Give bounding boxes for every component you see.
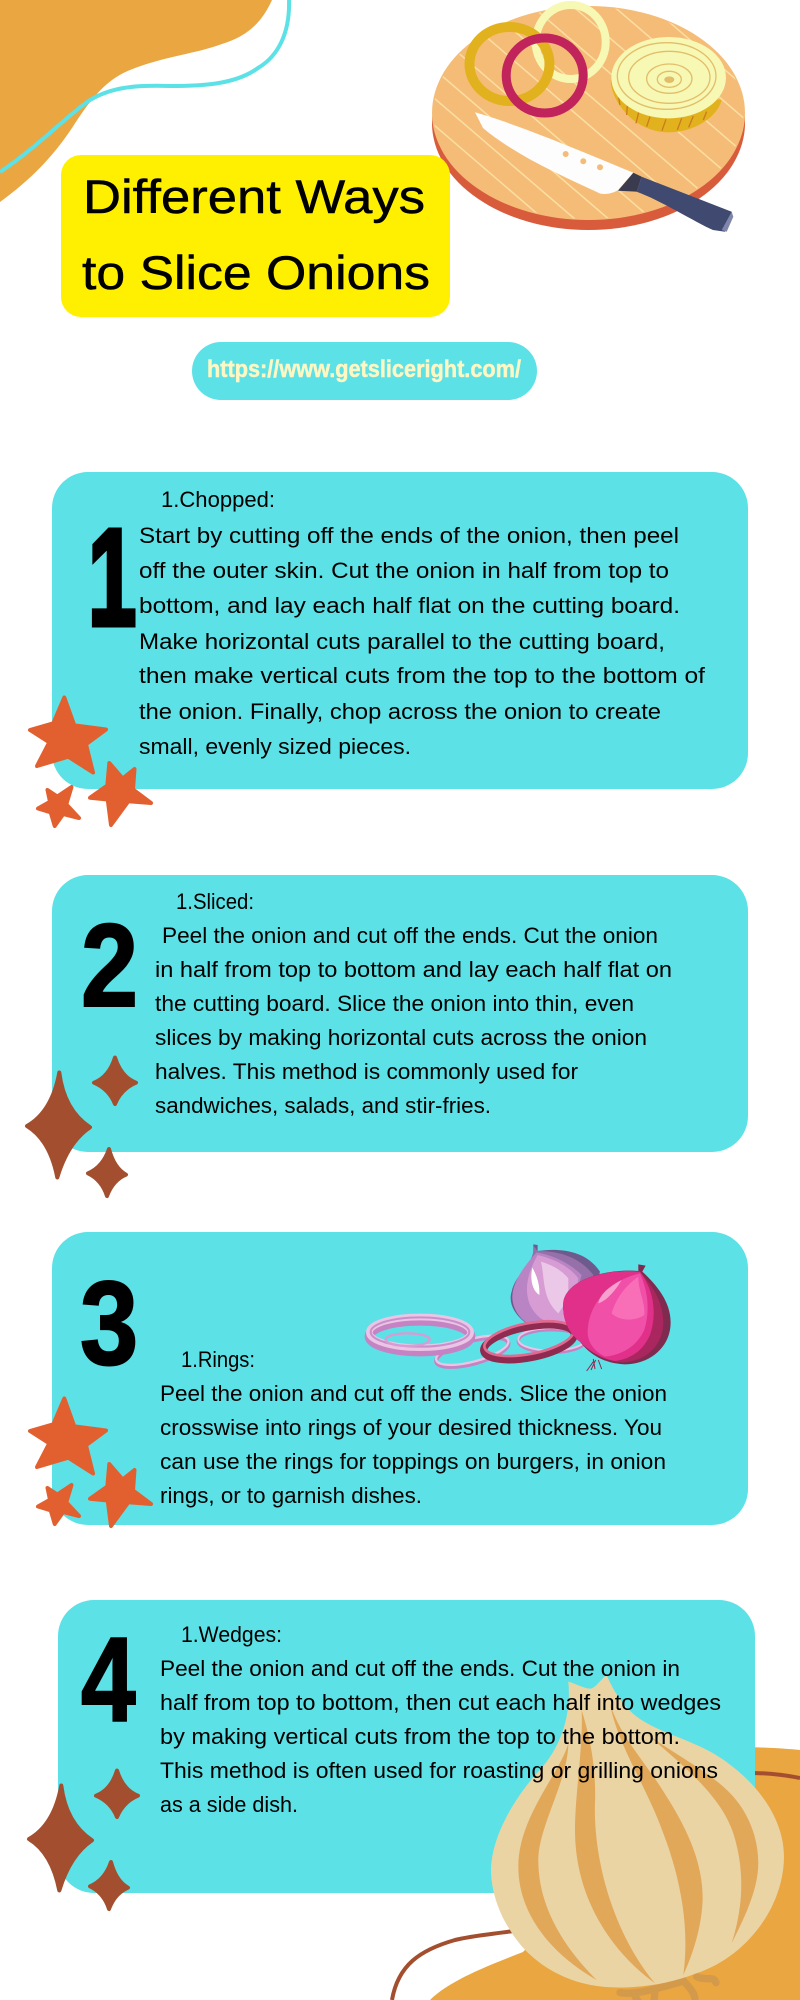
onion stripes: [518, 1703, 758, 1983]
sparkles: panel 4: [29, 1770, 138, 1909]
panel 2 text: sandwiches, salads, and stir-fries.: [155, 1093, 491, 1118]
panel 1 text: Start by cutting off the ends of the onion, then peel: [139, 523, 679, 548]
title background: [61, 155, 450, 317]
panel 1 text: 1.Chopped:: [161, 487, 275, 512]
panel 4 text: half from top to bottom, then cut each half into wedges: [160, 1690, 721, 1715]
panel 3 text: [160, 1347, 667, 1508]
panel 1 text: small, evenly sized pieces.: [139, 734, 411, 759]
onion body: [491, 1675, 784, 1987]
onion ring slices: [369, 1315, 585, 1373]
panel 1 text: Make horizontal cuts parallel to the cutting board,: [139, 629, 665, 654]
panel 4 text: 1.Wedges:: [181, 1622, 282, 1647]
panel 2 text: in half from top to bottom and lay each half flat on: [155, 957, 672, 982]
panel 2 text: slices by making horizontal cuts across the onion: [155, 1025, 647, 1050]
panel 1 text: off the outer skin. Cut the onion in half from top to: [139, 558, 669, 583]
back purple onion: [511, 1244, 600, 1322]
panel 1 text: the onion. Finally, chop across the onion to create: [139, 699, 661, 724]
url pill: https://www.getsliceright.com/: [207, 356, 521, 383]
title text: [82, 170, 430, 299]
numeral 1: 1: [88, 502, 136, 655]
panel 3 text: crosswise into rings of your desired thickness. You: [160, 1415, 662, 1440]
sparkles: panel 2: [27, 1058, 136, 1196]
panel 4 text: [160, 1622, 721, 1817]
stars: panel 1: [30, 698, 151, 826]
panel 1 text: then make vertical cuts from the top to the bottom of: [139, 663, 706, 688]
panel 2 text: [155, 889, 672, 1118]
decorative orange blob: bottom right: [430, 1747, 800, 2000]
panel 4: wedges background: [58, 1600, 755, 1893]
stars: panel 3: [30, 1398, 151, 1526]
onion slice: [611, 37, 726, 132]
panel 4 text: This method is often used for roasting or grilling onions: [160, 1758, 718, 1783]
panel 4 text: Peel the onion and cut off the ends. Cut the onion in: [160, 1656, 680, 1681]
knife: [475, 112, 733, 232]
panel 2 text: 1.Sliced:: [176, 889, 254, 914]
url pill: [192, 342, 537, 400]
numeral 2: 2: [81, 900, 138, 1032]
decorative brown curve: right: [750, 1773, 800, 1778]
title banner: [61, 155, 450, 317]
decorative cyan curve: top left: [0, 0, 289, 172]
onion roots: [620, 1977, 716, 2000]
panel 1: chopped background: [52, 472, 748, 789]
board edge: [432, 16, 745, 230]
panel 1 text: bottom, and lay each half flat on the cutting board.: [139, 593, 680, 618]
title text: to Slice Onions: [82, 246, 430, 299]
board grain lines: [434, 8, 744, 218]
illustration: cutting board with onion and knife: [432, 1, 745, 232]
panel 2 text: halves. This method is commonly used for: [155, 1059, 578, 1084]
decorative brown curve: bottom: [392, 1930, 520, 2000]
panel 2 text: the cutting board. Slice the onion into thin, even: [155, 991, 634, 1016]
panel 2: sliced background: [52, 875, 748, 1152]
illustration: large onion: [491, 1675, 784, 2000]
panel 3 text: rings, or to garnish dishes.: [160, 1483, 422, 1508]
panel 4 text: by making vertical cuts from the top to the bottom.: [160, 1724, 680, 1749]
onion rings on board: [470, 5, 606, 113]
panel 1 text: [139, 487, 706, 759]
front pink onion: [563, 1264, 671, 1371]
panel 2 text: Peel the onion and cut off the ends. Cut the onion: [162, 923, 658, 948]
board top: [432, 6, 745, 220]
panel 3 text: Peel the onion and cut off the ends. Slice the onion: [160, 1381, 667, 1406]
numeral 3: 3: [80, 1257, 138, 1389]
panel 3: rings background: [52, 1232, 748, 1525]
illustration: red onions and rings: [369, 1244, 671, 1373]
panel 3 text: can use the rings for toppings on burgers, in onion: [160, 1449, 666, 1474]
panel 3 text: 1.Rings:: [181, 1347, 255, 1372]
decorative orange blob: top left: [0, 0, 272, 202]
numeral 4: 4: [81, 1614, 136, 1747]
title text: Different Ways: [83, 170, 425, 223]
panel 4 text: as a side dish.: [160, 1792, 298, 1817]
